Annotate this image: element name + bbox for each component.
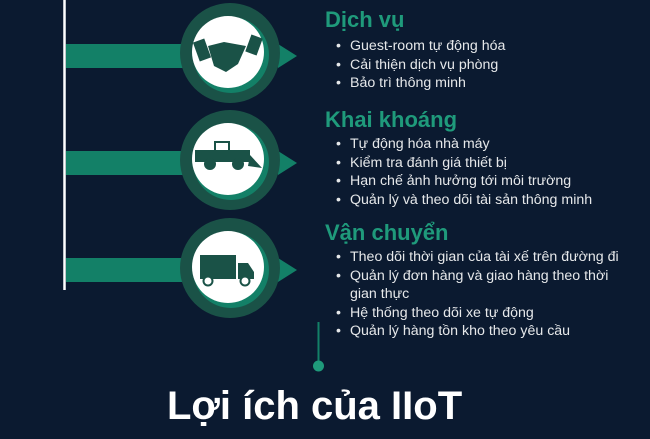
list: Dịch vụ: Cải thiện dịch vụ phòng	[350, 56, 498, 72]
title: Lợi ích của IIoT	[167, 384, 462, 428]
item 3 connector and icon	[66, 218, 297, 318]
icon: handshake	[193, 34, 263, 72]
list: Dịch vụ: Guest-room tự động hóa	[350, 38, 505, 54]
list: Vận chuyển: Hệ thống theo dõi xe tự động	[350, 304, 534, 320]
heading: Khai khoáng: Khai khoáng	[325, 107, 457, 132]
heading: Dịch vụ: Dịch vụ	[325, 7, 404, 32]
list: Vận chuyển: Quản lý đơn hàng và giao hàng theo thời	[350, 268, 608, 284]
list: Khai khoáng: Kiểm tra đánh giá thiết bị	[350, 154, 507, 170]
list: Khai khoáng	[336, 136, 592, 208]
list: Vận chuyển	[336, 249, 619, 339]
list: Dịch vụ	[336, 38, 506, 91]
connector dot	[313, 322, 324, 372]
icon: loader	[195, 142, 262, 170]
list: Khai khoáng: Hạn chế ảnh hưởng tới môi trường	[350, 173, 571, 189]
list: Khai khoáng: Tự động hóa nhà máy	[350, 136, 490, 152]
item 2 connector and icon	[66, 110, 297, 210]
list: Dịch vụ: Bảo trì thông minh	[350, 75, 466, 91]
list: Khai khoáng: Quản lý và theo dõi tài sản thông minh	[350, 192, 592, 208]
list: Vận chuyển: Quản lý hàng tồn kho theo yêu cầu	[350, 323, 570, 339]
heading: Vận chuyển: Vận chuyển	[325, 220, 448, 245]
icon: truck	[200, 255, 254, 286]
list: Vận chuyển: gian thực	[350, 286, 409, 302]
list: Vận chuyển: Theo dõi thời gian của tài xế trên đường đi	[350, 249, 619, 265]
item 1 connector and icon	[66, 3, 297, 103]
